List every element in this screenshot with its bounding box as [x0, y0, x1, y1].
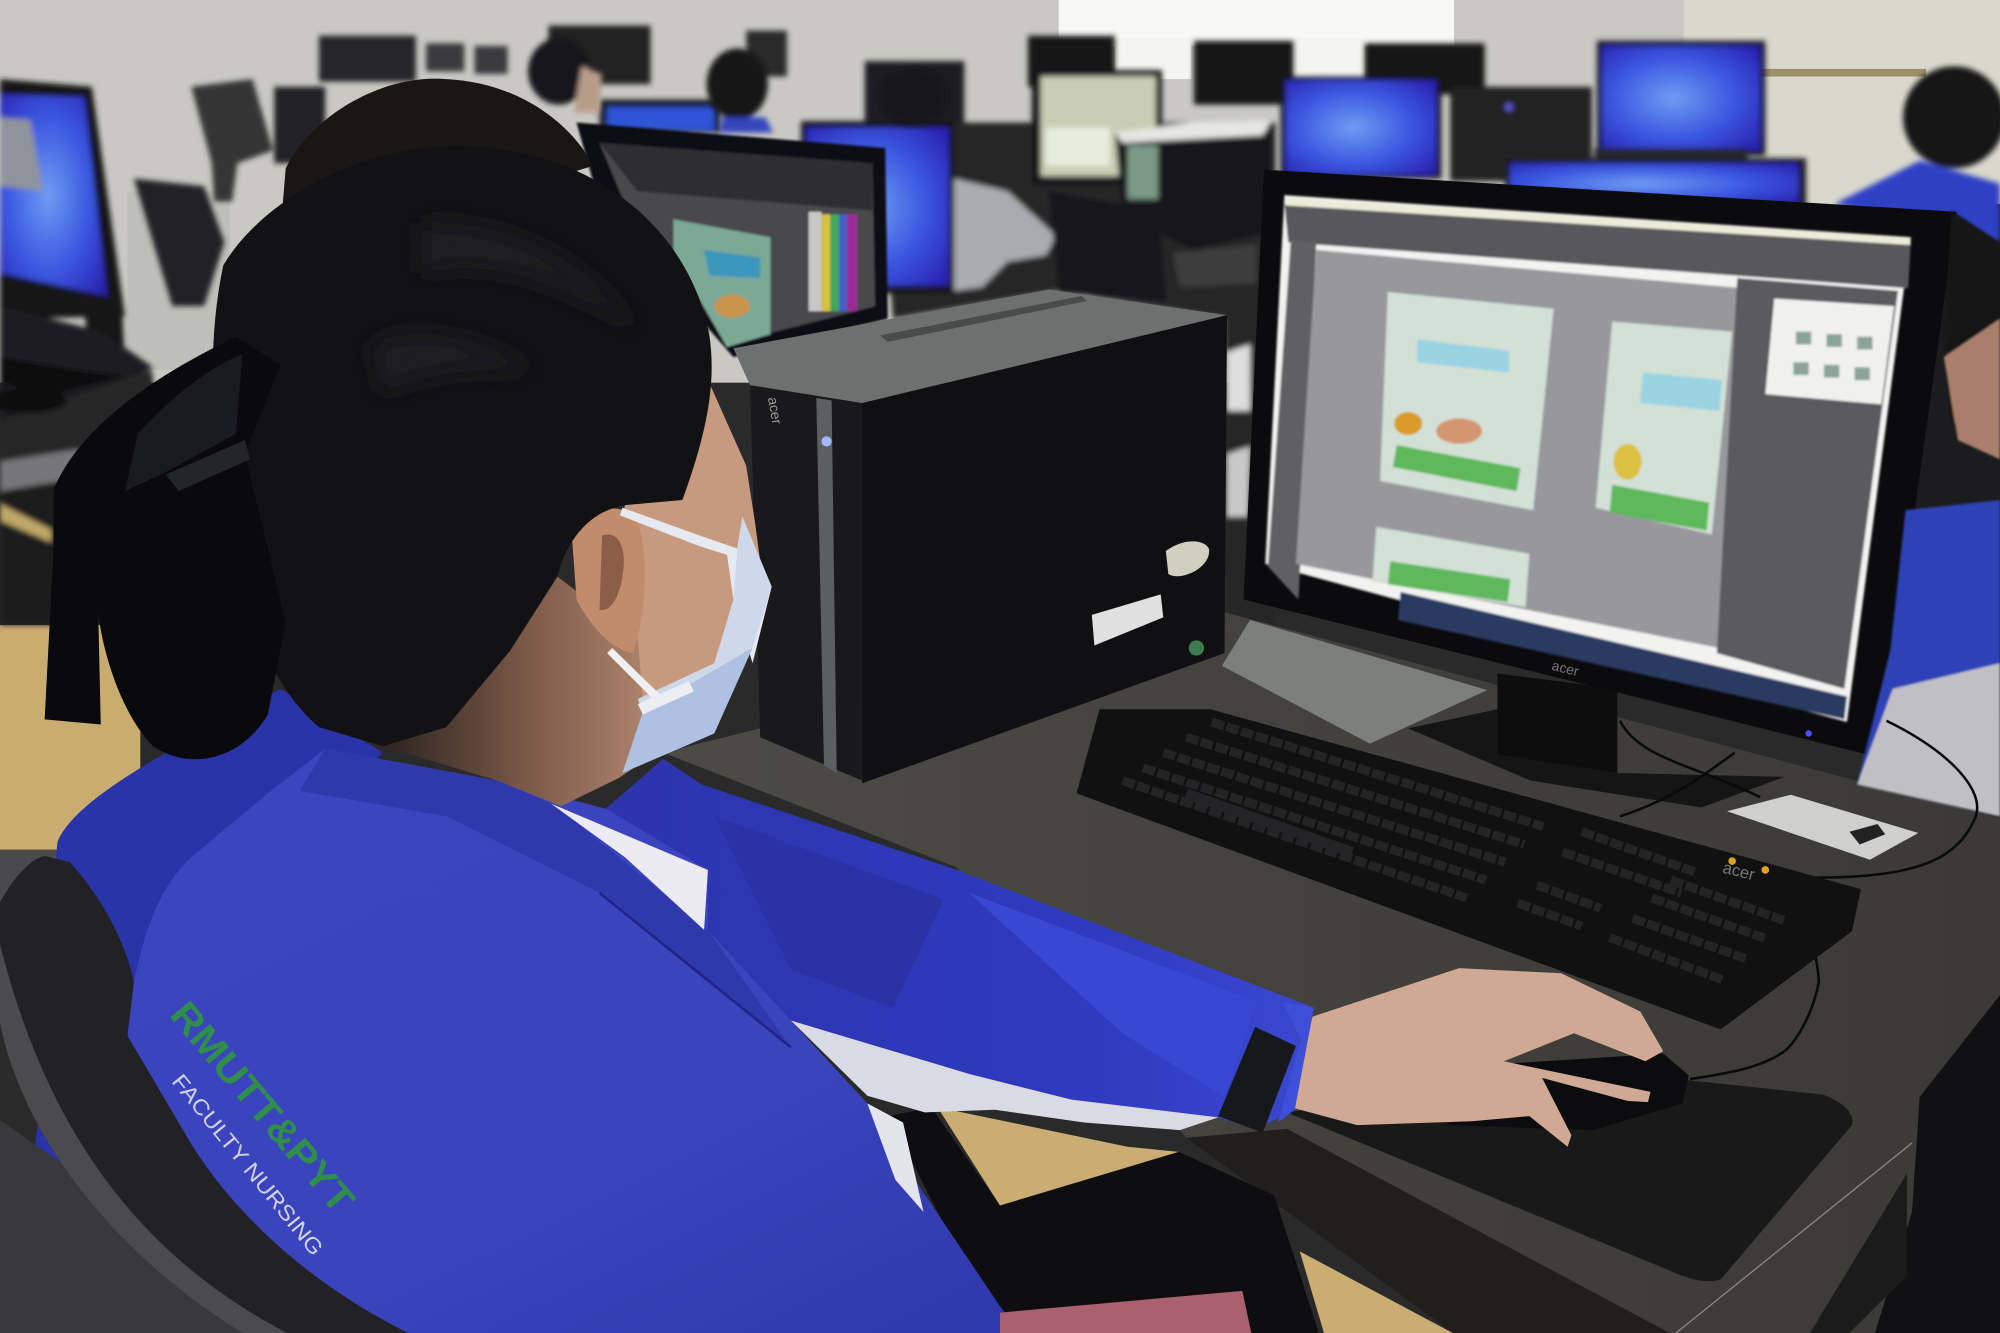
paper on desk [1222, 620, 1487, 744]
jacket white panel [791, 1020, 1218, 1130]
desk front edge [1186, 1129, 1670, 1333]
artboard two [1596, 321, 1732, 534]
chair [0, 856, 408, 1333]
sleeve folds [714, 816, 1314, 1123]
monitor screen [1265, 195, 1911, 722]
desk surface [663, 612, 2000, 1333]
computer tower [733, 290, 1227, 783]
second student jacket behind [18, 689, 383, 1256]
keyboard [1077, 709, 1861, 1029]
cables [1620, 721, 1977, 1079]
jacket [128, 749, 1314, 1333]
mouse [1446, 1054, 1689, 1130]
background: rows of computers [134, 26, 1806, 625]
computer tower: acer [765, 396, 785, 426]
shirt collar [551, 804, 708, 930]
hair bow [45, 337, 286, 759]
pants [889, 1107, 1319, 1333]
artboard one [1380, 292, 1554, 510]
colour picker swatch [809, 212, 857, 311]
background: left monitor [0, 79, 159, 625]
monitor stand [1408, 674, 1784, 807]
jacket lettering: FACULTY NURSING [167, 1069, 329, 1260]
face mask [607, 508, 772, 773]
face and neck [383, 383, 765, 806]
floor below the desk [1300, 1251, 1453, 1333]
artboard three [1372, 527, 1529, 607]
hair [213, 146, 712, 746]
hand on mouse [1291, 968, 1663, 1147]
floor beside the sleeve [938, 1107, 1179, 1205]
back head hair [281, 79, 593, 230]
background: distant people [528, 38, 2000, 242]
collar [300, 749, 791, 1047]
mouse pad [1287, 1069, 1852, 1281]
jacket lettering: RMUTT&PYT [161, 994, 362, 1221]
sleeve [606, 759, 1314, 1129]
monitor [1244, 170, 1957, 758]
phone case [1000, 1291, 1251, 1333]
cable adapter on desk [1727, 795, 1918, 860]
keyboard: acer [1721, 858, 1757, 884]
bag bottom right [1676, 995, 2000, 1333]
monitor: acer [1550, 657, 1581, 679]
hair highlights [370, 223, 638, 395]
cuff strap [1218, 1027, 1296, 1133]
taskbar [1398, 592, 1847, 719]
background: centre monitor with colour picker [577, 122, 888, 357]
right person [1857, 210, 2000, 816]
